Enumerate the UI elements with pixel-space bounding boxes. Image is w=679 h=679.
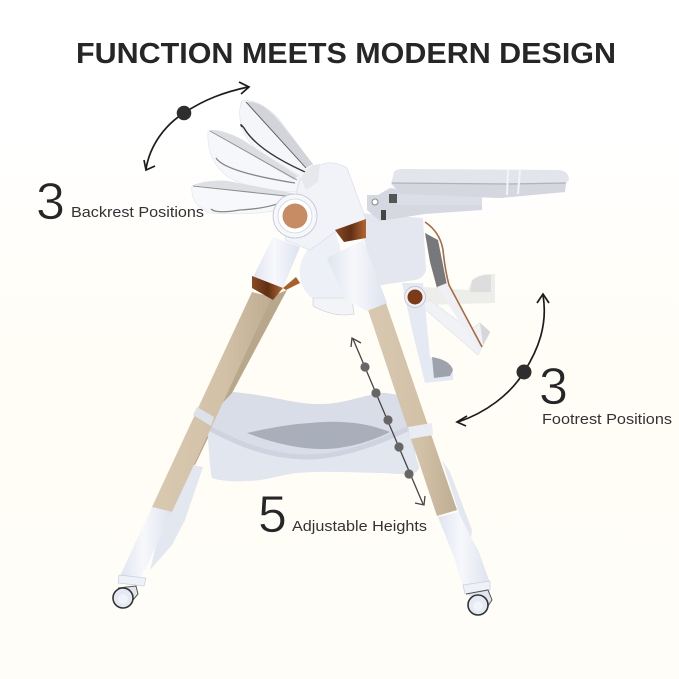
tray	[391, 169, 569, 198]
title: FUNCTION MEETS MODERN DESIGN	[76, 38, 616, 70]
callout: footrest positions: Footrest Positions	[542, 411, 672, 428]
seat side panel	[300, 230, 352, 300]
left leg side strut	[150, 465, 203, 570]
basket back wall	[212, 392, 417, 470]
upper body cap	[301, 164, 320, 190]
callout: footrest positions: 3	[539, 358, 568, 416]
front leg white sleeve	[327, 240, 387, 311]
height dots	[360, 362, 414, 479]
high chair illustration	[113, 101, 569, 615]
footrest support bar	[425, 222, 482, 350]
arrow: height adjustment	[351, 338, 425, 505]
footrest positions	[402, 222, 495, 383]
basket rim	[207, 427, 407, 457]
rear leg	[152, 292, 272, 512]
arrow: footrest arc	[457, 294, 549, 426]
callout: adjustable heights: 5	[258, 486, 287, 544]
tray arm latch	[372, 194, 397, 220]
arrow: backrest arc	[144, 82, 249, 170]
front leg	[368, 303, 457, 516]
callout: backrest positions: 3	[36, 173, 65, 231]
tray arm	[367, 188, 482, 221]
pivot	[404, 286, 426, 308]
front copper band	[335, 219, 366, 242]
left foot cap	[120, 507, 172, 579]
dot: footrest	[516, 364, 532, 380]
left basket clamp	[193, 407, 214, 426]
dot: backrest	[177, 106, 191, 120]
left wheel	[113, 586, 138, 608]
underseat latch	[313, 298, 354, 315]
rear copper band	[252, 276, 283, 300]
basket floor	[247, 422, 390, 449]
tray edge	[392, 183, 566, 198]
hub	[273, 194, 317, 238]
right foot cap	[438, 512, 490, 588]
right basket clamp	[408, 423, 433, 439]
callout: backrest positions	[36, 173, 204, 231]
right foot base	[463, 581, 490, 594]
lower footrest arm	[402, 283, 453, 383]
callout: footrest positions	[539, 358, 672, 428]
left foot base	[118, 575, 146, 586]
callout: adjustable heights	[258, 486, 427, 544]
ghost footrest middle	[420, 300, 490, 355]
callout: adjustable heights: Adjustable Heights	[292, 518, 427, 535]
backrest: middle position	[208, 130, 300, 192]
ghost footrest upper	[423, 274, 495, 305]
basket front wall	[207, 428, 419, 481]
backrest: bottom position	[192, 181, 296, 214]
right side strut	[442, 460, 472, 545]
lower pedal	[432, 357, 453, 378]
seat box	[358, 213, 426, 286]
rear second leg	[185, 290, 287, 465]
tray lower	[397, 193, 482, 205]
upper body	[285, 163, 365, 250]
storage basket	[207, 392, 419, 481]
right wheel	[466, 590, 492, 615]
backrest: top position	[240, 101, 313, 182]
callout: backrest positions: Backrest Positions	[71, 204, 204, 221]
rear leg white sleeve	[253, 237, 300, 288]
